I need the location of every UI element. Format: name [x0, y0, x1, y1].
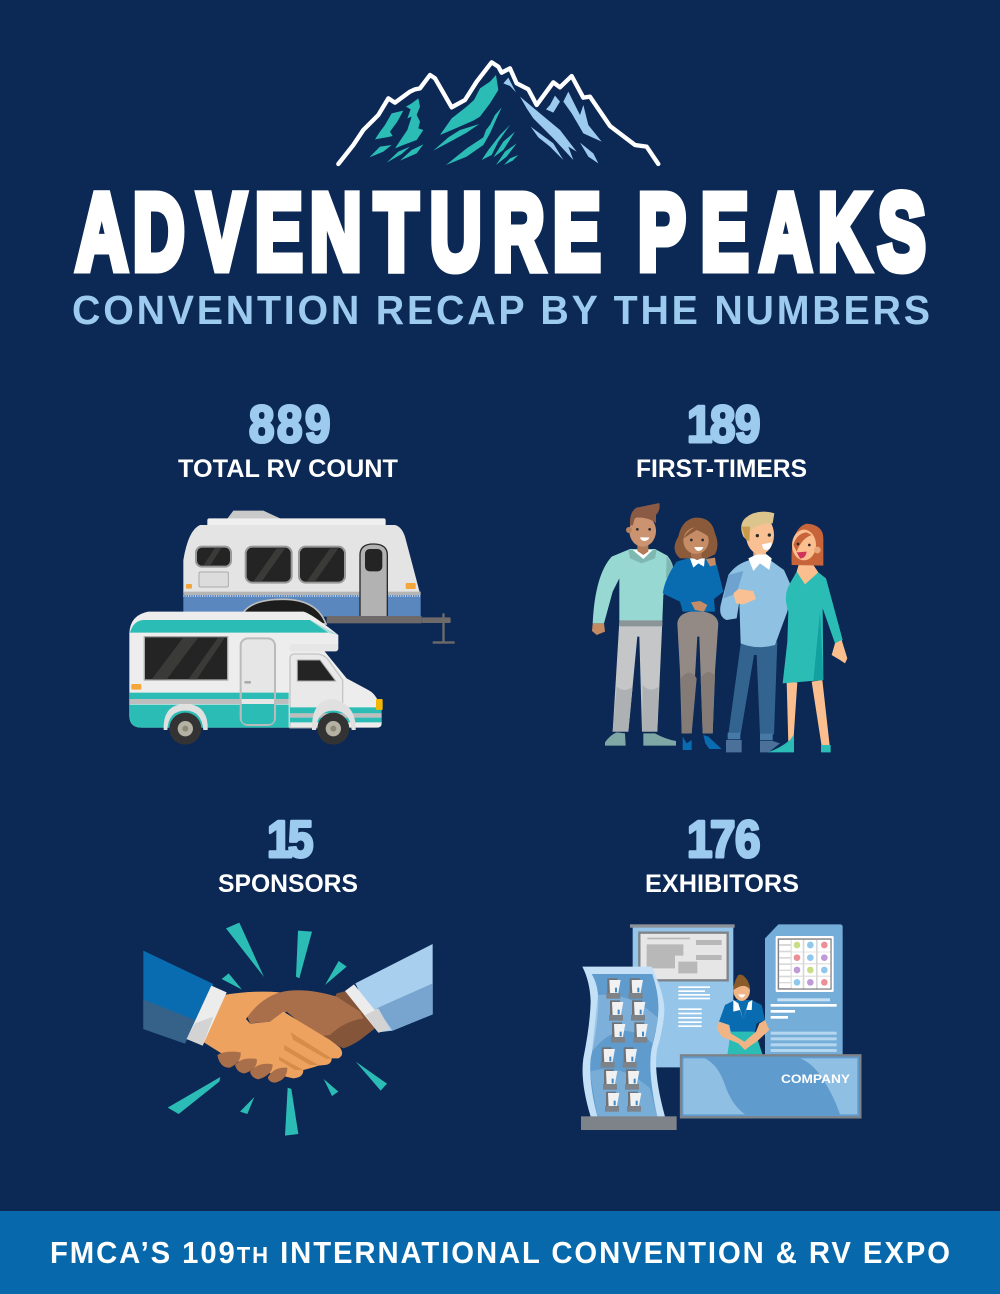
stat: sponsors: SPONSORS [218, 870, 358, 898]
stat: exhibitors: 176 [687, 811, 760, 869]
icon: four people [592, 503, 847, 752]
company desk: COMPANY [781, 1072, 851, 1086]
person: woman in teal dress [768, 524, 847, 752]
person: man in mint sweater [592, 503, 676, 746]
icon: mountain logo [338, 62, 658, 165]
stat: first-timers: 189 [687, 396, 760, 454]
stat: total RV count: TOTAL RV COUNT [178, 455, 398, 483]
icon: exhibitor booth [581, 924, 860, 1130]
subtitle: CONVENTION RECAP BY THE NUMBERS [72, 287, 930, 333]
stat: exhibitors [645, 811, 799, 898]
left banner panel [630, 924, 735, 1067]
person: receptionist [717, 975, 769, 1055]
person: woman in blue sweater [663, 518, 723, 750]
stat: sponsors: 15 [267, 811, 313, 869]
stat: first-timers [636, 396, 807, 483]
footer band: FMCA’S 109TH INTERNATIONAL CONVENTION & RV EXPO [50, 1236, 950, 1270]
company desk [681, 1055, 860, 1117]
brochures [601, 978, 648, 1112]
title: ADVENTURE PEAKS [76, 172, 926, 293]
stat: sponsors [218, 811, 358, 898]
stat: total RV count: 889 [249, 396, 330, 454]
bursts [168, 923, 387, 1136]
icon: handshake [143, 923, 433, 1136]
person: blond man in light blue sweater [720, 512, 791, 752]
curved brochure stand [581, 967, 677, 1130]
stat: exhibitors: EXHIBITORS [645, 870, 799, 898]
stat: first-timers: FIRST-TIMERS [636, 455, 807, 483]
right banner panel [765, 924, 843, 1058]
icon: RVs [129, 511, 455, 745]
stat: total RV count [178, 396, 398, 483]
footer band [0, 1211, 1000, 1294]
